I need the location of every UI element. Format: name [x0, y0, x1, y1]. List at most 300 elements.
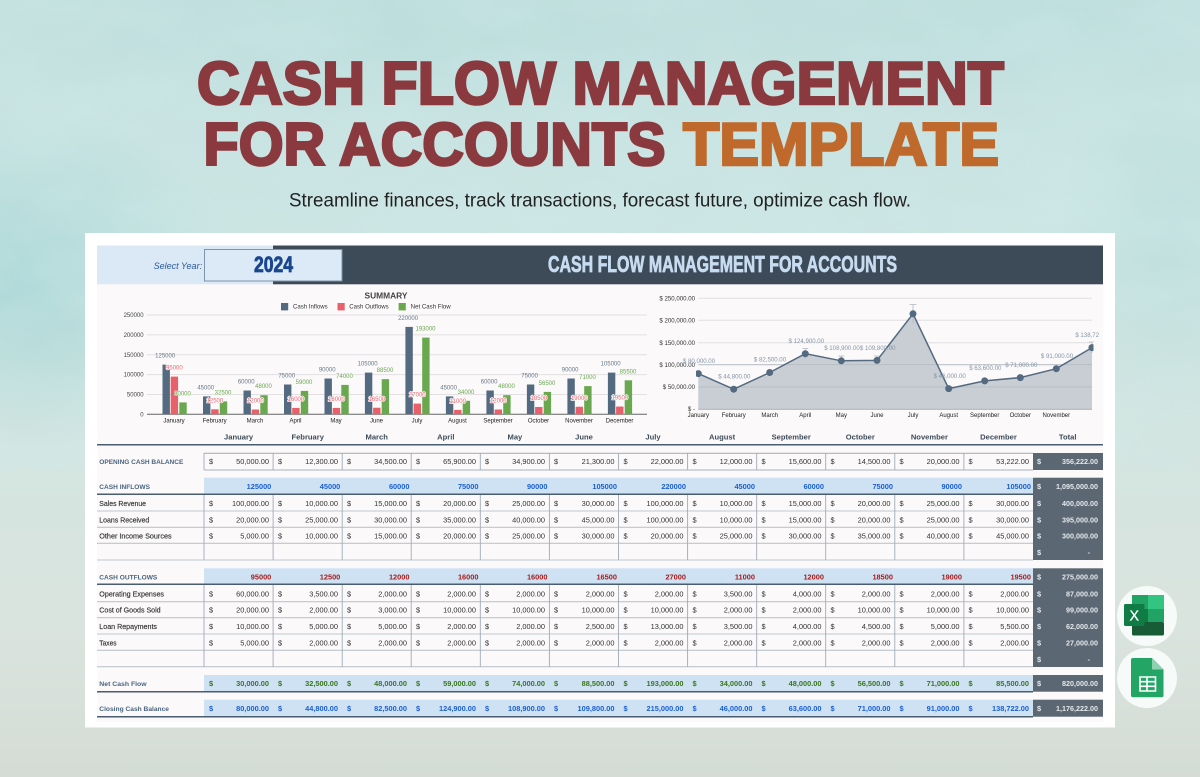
row: loans received: $ — [900, 515, 904, 524]
row: loan repayments — [99, 622, 1098, 631]
row: outflows blank total — [1037, 655, 1091, 664]
month headers: September — [772, 432, 811, 441]
x axis labels: July — [908, 413, 918, 419]
row: other income sources: $ — [347, 532, 351, 541]
row: closing cash balance: 80,000.00 — [236, 704, 269, 713]
data labels: net cash flow: 30000 — [174, 391, 192, 397]
row: net cash flow: $ — [900, 679, 904, 688]
row: taxes: $ — [209, 638, 213, 647]
point value labels: $ 138,72 — [1075, 332, 1100, 339]
row: other income sources: 35,000.00 — [858, 532, 890, 541]
data labels: inflows: 60000 — [238, 380, 255, 386]
row: net cash flow: 71,000.00 — [927, 679, 960, 688]
x axis labels: June — [370, 418, 384, 424]
row: loans received: 25,000.00 — [927, 515, 960, 524]
data labels: net cash flow: 48000 — [255, 384, 273, 390]
row: other income sources: 20,000.00 — [651, 532, 684, 541]
y axis labels: $ 200,000.00 — [659, 317, 696, 324]
data labels: net cash flow: 193000 — [415, 327, 436, 333]
row: closing cash balance: $ — [485, 704, 489, 713]
row: closing cash balance: $ — [830, 704, 835, 713]
row: taxes: $ — [900, 638, 904, 647]
icon: google sheets — [1117, 648, 1177, 708]
row: loans received: Loans Received — [99, 515, 149, 524]
data labels: outflows: 27000 — [409, 393, 426, 399]
row: sales revenue: 10,000.00 — [305, 499, 338, 508]
row: loans received: $ — [968, 515, 973, 524]
row: operating expenses: $ — [762, 589, 766, 598]
row: net cash flow: $ — [209, 679, 213, 688]
row: taxes: $ — [692, 638, 697, 647]
row: opening cash balance: 34,500.00 — [374, 457, 407, 466]
row: opening cash balance: $ — [762, 457, 766, 466]
row: cost of goods sold: $ — [278, 606, 282, 615]
row: opening cash balance: $ — [624, 457, 628, 466]
month headers: December — [980, 432, 1017, 441]
row: opening cash balance: 50,000.00 — [236, 457, 269, 466]
row: loans received: 395,000.00 — [1062, 515, 1098, 524]
row: loan repayments: $ — [830, 622, 835, 631]
row: cost of goods sold: $ — [830, 606, 835, 615]
data labels: inflows: 75000 — [521, 374, 539, 380]
line and points — [695, 310, 1096, 393]
area fill — [698, 314, 1092, 409]
data labels: net cash flow: 71000 — [579, 375, 597, 381]
row: closing cash balance: $ — [278, 704, 282, 713]
row: opening cash balance: 22,000.00 — [651, 457, 684, 466]
row: loan repayments: $ — [762, 622, 766, 631]
row: sales revenue: $ — [830, 499, 835, 508]
row: opening cash balance: OPENING CASH BALANCE — [99, 459, 184, 466]
row: cash outflows: 16000 — [527, 572, 548, 581]
x axis labels: November — [1042, 413, 1070, 419]
data labels: net cash flow: 56500 — [539, 381, 556, 387]
header band — [97, 246, 1103, 284]
data labels: net cash flow — [174, 327, 637, 397]
row: loans received: 45,000.00 — [582, 515, 614, 524]
row: closing cash balance: $ — [209, 704, 213, 713]
row: net cash flow: $ — [485, 679, 489, 688]
row: sales revenue: $ — [416, 499, 420, 508]
row: cost of goods sold: 2,000.00 — [793, 606, 822, 615]
row: cash outflows: 16500 — [596, 572, 617, 581]
row: taxes: 2,000.00 — [447, 638, 476, 647]
row: sales revenue: 25,000.00 — [927, 499, 960, 508]
x axis labels: July — [412, 418, 422, 424]
legend: Cash Outflows — [349, 304, 389, 310]
row: other income sources: 25,000.00 — [720, 532, 752, 541]
y axis labels: 0 — [140, 412, 144, 418]
row: cash outflows — [99, 572, 1098, 581]
row: sales revenue: 15,000.00 — [789, 499, 822, 508]
row: closing cash balance: $ — [554, 704, 558, 713]
row: sales revenue: 20,000.00 — [443, 499, 476, 508]
row: closing cash balance: 44,800.00 — [305, 704, 338, 713]
row: loan repayments: 62,000.00 — [1066, 622, 1098, 631]
row: operating expenses: $ — [968, 589, 973, 598]
row: opening cash balance: $ — [209, 457, 213, 466]
row: loan repayments: $ — [624, 622, 628, 631]
row: taxes: $ — [416, 638, 420, 647]
row: taxes: Taxes — [99, 638, 117, 647]
month headers: April — [437, 432, 454, 441]
row: operating expenses: 2,000.00 — [447, 589, 476, 598]
data labels: outflows: 16500 — [368, 397, 386, 403]
row: sales revenue: $ — [1037, 499, 1041, 508]
row: opening cash balance: 12,000.00 — [720, 457, 752, 466]
row: other income sources: 10,000.00 — [305, 532, 338, 541]
row: operating expenses: 2,000.00 — [378, 589, 407, 598]
row: taxes: 2,000.00 — [586, 638, 614, 647]
row: other income sources: $ — [762, 532, 766, 541]
row: closing cash balance: 91,000.00 — [927, 704, 960, 713]
row: net cash flow: 820,000.00 — [1062, 679, 1098, 688]
row: sales revenue: 10,000.00 — [720, 499, 752, 508]
point value labels — [683, 332, 1100, 380]
row: closing cash balance: Closing Cash Balance — [99, 706, 169, 713]
row: loans received: 30,000.00 — [374, 515, 407, 524]
row: loan repayments: $ — [900, 622, 904, 631]
row: net cash flow: 32,500.00 — [305, 679, 338, 688]
row: other income sources: 300,000.00 — [1062, 532, 1098, 541]
row: cash inflows: $ — [1037, 482, 1041, 491]
row: closing cash balance: 215,000.00 — [646, 704, 684, 713]
row: operating expenses: 4,000.00 — [793, 589, 822, 598]
row: cash inflows: 45000 — [734, 482, 755, 491]
row: loan repayments: $ — [1037, 622, 1041, 631]
row: cash outflows: 18500 — [872, 572, 893, 581]
row: opening cash balance: 356,222.00 — [1062, 457, 1098, 466]
y axis labels: $ - — [688, 406, 695, 413]
row: cost of goods sold: 10,000.00 — [651, 606, 684, 615]
row: operating expenses: 2,000.00 — [931, 589, 960, 598]
data labels: outflows: 12000 — [247, 398, 264, 404]
row: loans received: 40,000.00 — [512, 515, 545, 524]
row: cash inflows: 105000 — [592, 482, 617, 491]
row: outflows blank total: $ — [1037, 655, 1041, 664]
sheet heading: CASH FLOW MANAGEMENT FOR ACCOUNTS — [548, 251, 897, 277]
legend: Cash Inflows — [293, 304, 328, 310]
row: loan repayments: $ — [485, 622, 489, 631]
title: FOR ACCOUNTS — [204, 110, 666, 178]
legend: Net Cash Flow — [411, 304, 451, 310]
row: sales revenue: 15,000.00 — [374, 499, 407, 508]
x axis labels: April — [799, 413, 811, 419]
row: net cash flow: 30,000.00 — [236, 679, 269, 688]
data labels: net cash flow: 59000 — [296, 380, 313, 386]
row: loans received: $ — [485, 515, 489, 524]
chart title: SUMMARY — [365, 291, 408, 301]
x axis labels: November — [565, 418, 593, 424]
row: taxes: 27,000.00 — [1066, 638, 1098, 647]
row: other income sources: 15,000.00 — [374, 532, 407, 541]
area chart: closing cash balance — [659, 295, 1100, 419]
row: net cash flow: $ — [830, 679, 835, 688]
row: loans received — [99, 515, 1098, 524]
row: cost of goods sold: 10,000.00 — [443, 606, 476, 615]
row: closing cash balance: $ — [1037, 704, 1041, 713]
row: operating expenses: $ — [416, 589, 420, 598]
month headers: July — [645, 432, 661, 441]
row: closing cash balance: 63,600.00 — [789, 704, 822, 713]
row: loans received: $ — [209, 515, 213, 524]
month headers: February — [291, 432, 325, 441]
row: cash inflows: 90000 — [941, 482, 962, 491]
row: sales revenue: $ — [209, 499, 213, 508]
point value labels: $ 108,900.00 — [824, 345, 860, 352]
row: cash inflows: 45000 — [320, 482, 340, 491]
y axis labels: 150000 — [124, 353, 144, 359]
row: operating expenses: 2,000.00 — [586, 589, 614, 598]
row: opening cash balance: 15,600.00 — [789, 457, 822, 466]
row: cost of goods sold: 10,000.00 — [996, 606, 1029, 615]
x axis labels — [163, 418, 633, 424]
bars: net cash flow — [179, 338, 632, 414]
row: opening cash balance: 65,900.00 — [443, 457, 476, 466]
row: loans received: $ — [624, 515, 628, 524]
row: opening cash balance — [99, 457, 1098, 466]
title — [197, 49, 1004, 178]
row: loans received: 25,000.00 — [305, 515, 338, 524]
row: loans received: $ — [347, 515, 351, 524]
row: loan repayments: 13,000.00 — [651, 622, 684, 631]
x axis labels: February — [722, 413, 746, 419]
row: cash outflows: 19500 — [1010, 572, 1031, 581]
row: sales revenue: 100,000.00 — [232, 499, 269, 508]
row: opening cash balance: $ — [1037, 457, 1041, 466]
row: net cash flow: $ — [692, 679, 697, 688]
row: sales revenue: $ — [485, 499, 489, 508]
row: net cash flow: 74,000.00 — [512, 679, 545, 688]
row: loans received: $ — [1037, 515, 1041, 524]
row: other income sources: $ — [900, 532, 904, 541]
title: CASH FLOW MANAGEMENT — [197, 49, 1004, 117]
row: operating expenses: $ — [209, 589, 213, 598]
x axis labels — [688, 413, 1070, 419]
row: cost of goods sold: 10,000.00 — [927, 606, 960, 615]
row: net cash flow: 48,000.00 — [374, 679, 407, 688]
row: loan repayments: 2,000.00 — [516, 622, 545, 631]
row: loan repayments: 3,500.00 — [724, 622, 752, 631]
row: taxes: 2,000.00 — [931, 638, 960, 647]
row: closing cash balance: 124,900.00 — [439, 704, 476, 713]
row: loan repayments: $ — [554, 622, 558, 631]
row: taxes: 5,000.00 — [240, 638, 269, 647]
row: taxes: $ — [968, 638, 973, 647]
y axis labels: $ 100,000.00 — [659, 362, 696, 369]
month headers: October — [846, 432, 875, 441]
row: loan repayments: 4,500.00 — [862, 622, 890, 631]
row: loan repayments: $ — [278, 622, 282, 631]
month headers: January — [224, 432, 254, 441]
row: loan repayments: 2,000.00 — [447, 622, 476, 631]
row: operating expenses: $ — [278, 589, 282, 598]
month headers: May — [508, 432, 523, 441]
row: cash outflows: 12000 — [389, 572, 410, 581]
row: loan repayments: $ — [416, 622, 420, 631]
y axis labels: 50000 — [127, 393, 144, 399]
row: sales revenue: $ — [624, 499, 628, 508]
row: other income sources: $ — [416, 532, 420, 541]
x axis labels: April — [289, 418, 302, 424]
row: closing cash balance: $ — [762, 704, 766, 713]
row: net cash flow: $ — [624, 679, 628, 688]
row: closing cash balance: 46,000.00 — [720, 704, 752, 713]
row: closing cash balance: $ — [692, 704, 697, 713]
row: opening cash balance: $ — [830, 457, 835, 466]
row: operating expenses: $ — [900, 589, 904, 598]
row: cash outflows: 12000 — [803, 572, 824, 581]
row: loan repayments: $ — [968, 622, 973, 631]
data labels: inflows: 90000 — [319, 368, 336, 374]
point value labels: $ 91,000.00 — [1041, 353, 1074, 360]
icon: excel — [1117, 586, 1177, 646]
row: cost of goods sold: 2,000.00 — [309, 606, 338, 615]
row: opening cash balance: 14,500.00 — [858, 457, 890, 466]
data labels: net cash flow: 48000 — [498, 384, 516, 390]
data labels: net cash flow: 88500 — [377, 368, 394, 374]
row: operating expenses: $ — [830, 589, 835, 598]
row: opening cash balance: $ — [416, 457, 420, 466]
row: inflows blank total: - — [1088, 548, 1091, 557]
error bars — [802, 304, 1095, 366]
row: loans received: 30,000.00 — [996, 515, 1029, 524]
panel: spreadsheet sheet — [85, 233, 1115, 728]
x axis labels: October — [528, 418, 549, 424]
point value labels: $ 46,000.00 — [934, 373, 966, 380]
subtitle: Streamline finances, track transactions, forecast future, optimize cash flow. — [289, 190, 911, 212]
month headers: March — [366, 432, 388, 441]
x axis labels: December — [606, 418, 633, 424]
row: other income sources: 5,000.00 — [240, 532, 269, 541]
row: closing cash balance: 109,800.00 — [578, 704, 614, 713]
point value labels: $ 80,000.00 — [683, 358, 716, 365]
row: taxes: 2,000.00 — [1000, 638, 1029, 647]
y axis labels: $ 250,000.00 — [659, 295, 696, 302]
row: net cash flow: $ — [278, 679, 282, 688]
row: loan repayments: 2,500.00 — [586, 622, 614, 631]
row: cash outflows: CASH OUTFLOWS — [99, 574, 158, 581]
y axis labels — [659, 295, 696, 413]
x axis labels: August — [939, 413, 958, 419]
y axis labels: 200000 — [124, 333, 144, 339]
row: other income sources: 25,000.00 — [512, 532, 545, 541]
row: cash outflows: 16000 — [458, 572, 478, 581]
x axis labels: June — [870, 413, 884, 419]
row: cost of goods sold: $ — [416, 606, 420, 615]
row: opening cash balance: 20,000.00 — [927, 457, 960, 466]
row: operating expenses: 60,000.00 — [236, 589, 269, 598]
row: cost of goods sold: $ — [900, 606, 904, 615]
row: taxes: 2,000.00 — [724, 638, 752, 647]
row: other income sources: 20,000.00 — [443, 532, 476, 541]
row: taxes: $ — [830, 638, 835, 647]
row: cost of goods sold: $ — [554, 606, 558, 615]
month headers: Total — [1059, 432, 1076, 441]
row: taxes: $ — [1037, 638, 1041, 647]
row: loans received: $ — [692, 515, 697, 524]
row: sales revenue — [99, 499, 1098, 508]
x axis labels: May — [330, 418, 342, 424]
row: opening cash balance: $ — [968, 457, 973, 466]
row: taxes: $ — [762, 638, 766, 647]
row: net cash flow — [99, 679, 1098, 688]
data labels: inflows: 220000 — [398, 316, 419, 322]
row: operating expenses: 2,000.00 — [655, 589, 684, 598]
row: net cash flow: 59,000.00 — [443, 679, 476, 688]
row: other income sources: $ — [624, 532, 628, 541]
row: other income sources: Other Income Sources — [99, 532, 172, 541]
month headers: November — [911, 432, 948, 441]
row: loan repayments: Loan Repayments — [99, 622, 157, 631]
row: taxes: 2,000.00 — [655, 638, 684, 647]
x axis labels: January — [163, 418, 185, 424]
row: cost of goods sold: 10,000.00 — [512, 606, 545, 615]
row: operating expenses — [99, 589, 1098, 598]
point value labels: $ 63,600.00 — [969, 365, 1002, 372]
year selector — [204, 250, 342, 281]
row: cash inflows — [99, 482, 1098, 491]
row: inflows blank total: $ — [1037, 548, 1041, 557]
data labels: inflows: 75000 — [278, 374, 296, 380]
data labels: net cash flow: 32500 — [215, 390, 232, 396]
row: taxes: $ — [624, 638, 628, 647]
row: opening cash balance: 12,300.00 — [305, 457, 338, 466]
bars: cash outflows — [171, 377, 623, 414]
row: sales revenue: $ — [554, 499, 558, 508]
x axis labels: October — [1010, 413, 1031, 419]
row: net cash flow: 85,500.00 — [996, 679, 1029, 688]
row: taxes: $ — [554, 638, 558, 647]
data labels: inflows: 60000 — [481, 380, 498, 386]
row: cash outflows: 95000 — [251, 572, 271, 581]
row: net cash flow: $ — [347, 679, 351, 688]
data labels: outflows: 95000 — [166, 366, 183, 372]
row: sales revenue: $ — [968, 499, 973, 508]
row: taxes: 2,000.00 — [378, 638, 407, 647]
data labels: outflows: 12000 — [490, 398, 507, 404]
row: closing cash balance: $ — [624, 704, 628, 713]
row: opening cash balance: 21,300.00 — [582, 457, 614, 466]
row: net cash flow: $ — [416, 679, 420, 688]
row: closing cash balance: $ — [416, 704, 420, 713]
row: opening cash balance: $ — [900, 457, 904, 466]
row: taxes: 2,000.00 — [516, 638, 545, 647]
row: opening cash balance: 53,222.00 — [996, 457, 1029, 466]
row: cash outflows: $ — [1037, 572, 1041, 581]
row: cash outflows: 19000 — [941, 572, 962, 581]
data labels: outflows: 11000 — [450, 399, 467, 405]
y axis labels — [124, 313, 144, 418]
row: net cash flow: 88,500.00 — [582, 679, 614, 688]
row: cost of goods sold: 10,000.00 — [582, 606, 614, 615]
point value labels: $ 124,900.00 — [789, 338, 825, 345]
row: cash inflows: 60000 — [389, 482, 410, 491]
row: cost of goods sold: 99,000.00 — [1066, 606, 1098, 615]
data labels: outflows — [166, 366, 629, 405]
legend — [281, 303, 451, 310]
bars: cash inflows — [162, 327, 615, 414]
data labels: inflows: 105000 — [601, 362, 621, 368]
year selector: 2024 — [254, 252, 294, 277]
row: net cash flow: $ — [762, 679, 766, 688]
row: outflows blank total: - — [1088, 655, 1091, 664]
row: sales revenue: Sales Revenue — [99, 499, 146, 508]
row: operating expenses: 2,000.00 — [516, 589, 545, 598]
x axis labels: March — [247, 418, 263, 424]
row: loans received: 15,000.00 — [789, 515, 822, 524]
row: loans received: $ — [278, 515, 282, 524]
